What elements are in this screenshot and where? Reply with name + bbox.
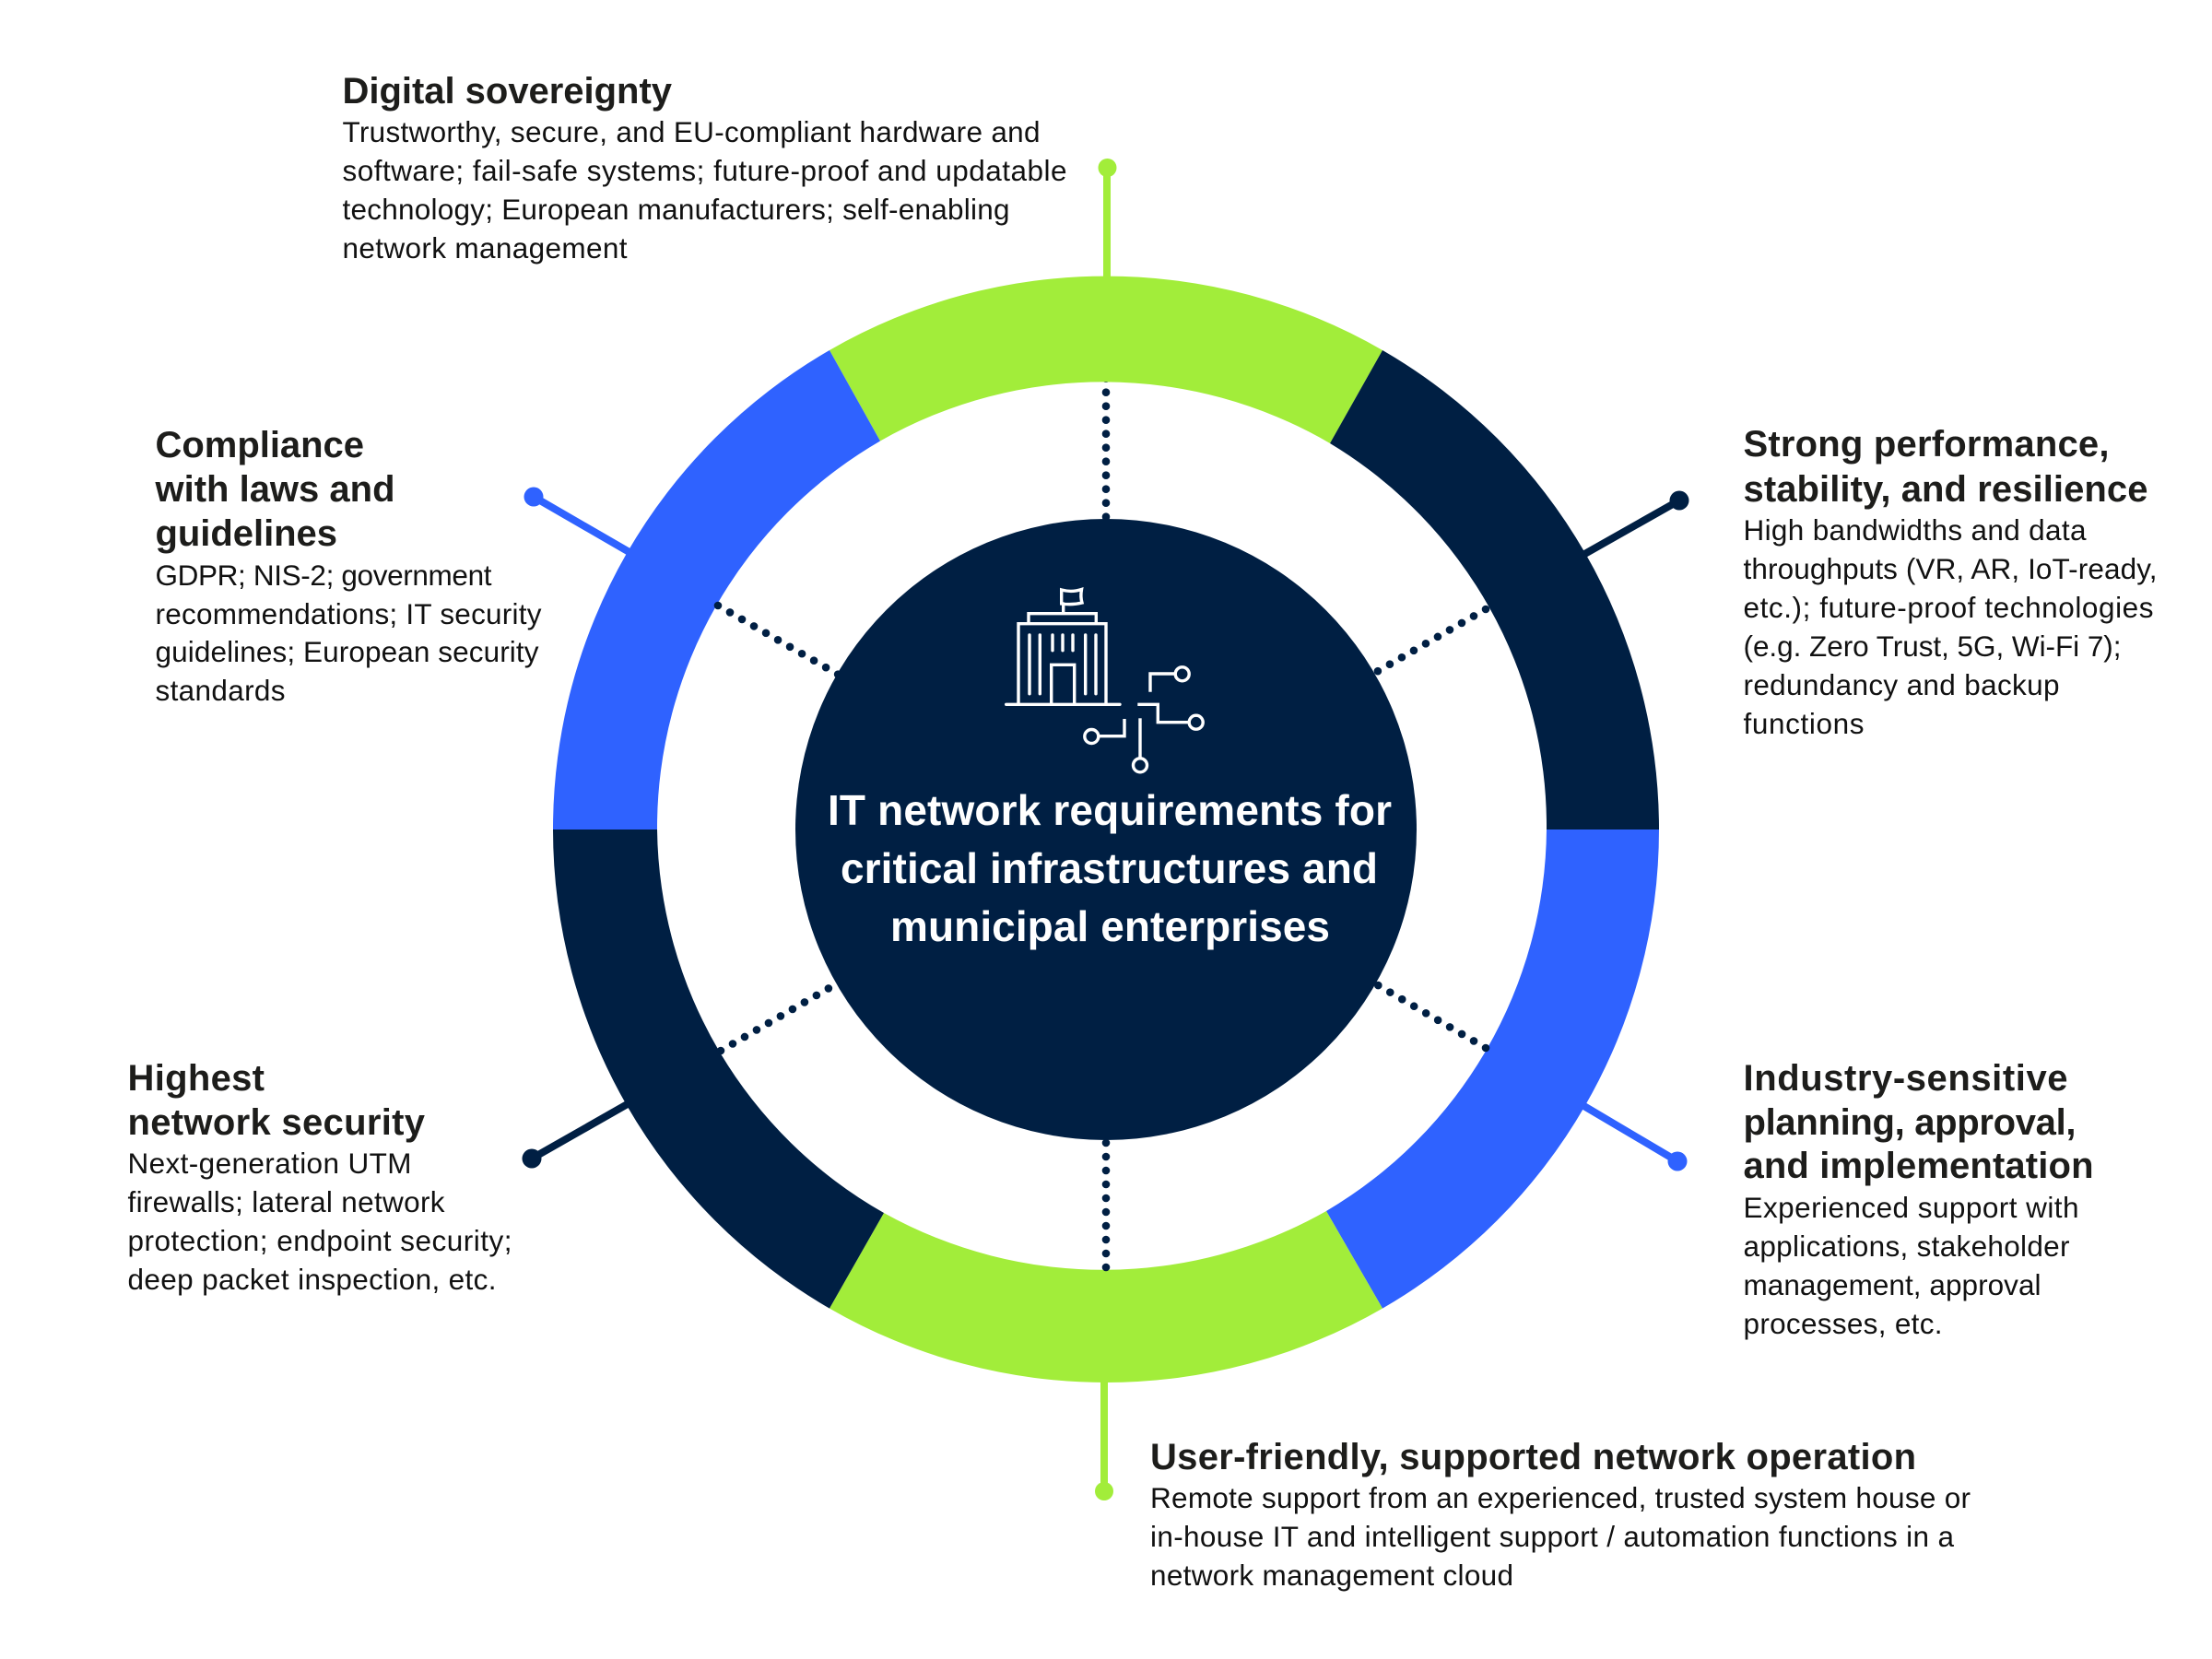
connector: user-friendly operation <box>1095 1373 1113 1500</box>
heading <box>155 425 394 554</box>
heading: User-friendly, supported network operation <box>1150 1437 1916 1477</box>
dotted spoke: top <box>1102 379 1110 525</box>
body text: throughputs (VR, AR, IoT-ready, <box>1744 552 2157 585</box>
segment: navy lower left <box>553 830 884 1309</box>
panel: highest network security <box>127 1058 512 1296</box>
body text <box>1744 513 2157 740</box>
body text: Trustworthy, secure, and EU-compliant hardware and <box>343 115 1040 148</box>
body text <box>127 1147 512 1296</box>
body text: management, approval <box>1744 1268 2041 1301</box>
heading: Industry-sensitive <box>1744 1058 2068 1099</box>
heading: stability, and resilience <box>1744 469 2147 510</box>
body text: protection; endpoint security; <box>127 1224 512 1257</box>
heading <box>127 1058 426 1143</box>
heading: network security <box>127 1102 426 1143</box>
heading: Digital sovereignty <box>343 71 673 112</box>
body text: recommendations; IT security <box>155 597 542 630</box>
panel: industry-sensitive planning <box>1744 1058 2094 1340</box>
body text <box>155 559 542 707</box>
body text: firewalls; lateral network <box>127 1185 445 1218</box>
body text: (e.g. Zero Trust, 5G, Wi-Fi 7); <box>1744 629 2122 663</box>
icon: government building with circuit <box>1006 590 1203 772</box>
body text: etc.); future-proof technologies <box>1744 591 2153 624</box>
body text: functions <box>1744 707 1864 740</box>
heading: Strong performance, <box>1744 424 2109 465</box>
connector: industry-sensitive planning <box>1567 1096 1687 1171</box>
icon part: circuit <box>1085 667 1203 772</box>
heading: Compliance <box>155 425 364 465</box>
body text <box>343 115 1067 265</box>
centre title <box>828 786 1392 950</box>
body text: Experienced support with <box>1744 1191 2079 1224</box>
segment: green top <box>830 276 1382 443</box>
panel: compliance <box>155 425 542 707</box>
body text: guidelines; European security <box>155 635 539 668</box>
icon part: building <box>1006 590 1120 704</box>
body text: standards <box>155 674 286 707</box>
panel: strong performance <box>1744 424 2157 740</box>
centre title: municipal enterprises <box>890 902 1330 950</box>
segment: navy upper right <box>1330 350 1659 830</box>
body text: software; fail-safe systems; future-proof and updatable <box>343 154 1067 187</box>
body text <box>1150 1481 1971 1592</box>
centre title: critical infrastructures and <box>841 844 1378 892</box>
heading <box>1744 1058 2094 1186</box>
centre title: IT network requirements for <box>828 786 1392 834</box>
connector: digital sovereignty <box>1099 159 1117 286</box>
body text: in-house IT and intelligent support / automation functions in a <box>1150 1520 1954 1553</box>
connector lines with end dots <box>522 159 1688 1500</box>
heading: and implementation <box>1744 1146 2094 1186</box>
body text: processes, etc. <box>1744 1307 1943 1340</box>
body text: redundancy and backup <box>1744 668 2059 701</box>
dotted spokes over the ring <box>718 606 1486 1270</box>
ring of six segments <box>553 276 1659 1382</box>
heading <box>1744 424 2147 510</box>
segment: blue lower right <box>1326 830 1659 1309</box>
body text: GDPR; NIS-2; government <box>155 559 492 592</box>
panel: digital sovereignty <box>343 71 1067 265</box>
body text: deep packet inspection, etc. <box>127 1263 496 1296</box>
panel: user-friendly operation <box>1150 1437 1971 1592</box>
heading: with laws and <box>155 469 394 510</box>
centre circle <box>795 519 1417 1140</box>
body text: High bandwidths and data <box>1744 513 2087 547</box>
heading: guidelines <box>155 513 337 554</box>
body text: applications, stakeholder <box>1744 1230 2070 1263</box>
heading: Highest <box>127 1058 265 1099</box>
body text: technology; European manufacturers; self-enabling <box>343 193 1010 226</box>
connector: strong performance <box>1567 490 1688 564</box>
connector: highest network security <box>522 1094 645 1169</box>
segment: green bottom <box>830 1211 1382 1382</box>
body text: network management <box>343 231 628 265</box>
heading: planning, approval, <box>1744 1102 2076 1143</box>
segment: blue upper left <box>553 350 880 830</box>
body text: network management cloud <box>1150 1559 1513 1592</box>
connector: compliance <box>524 487 645 561</box>
body text: Remote support from an experienced, trusted system house or <box>1150 1481 1971 1514</box>
body text <box>1744 1191 2079 1340</box>
body text: Next-generation UTM <box>127 1147 411 1180</box>
